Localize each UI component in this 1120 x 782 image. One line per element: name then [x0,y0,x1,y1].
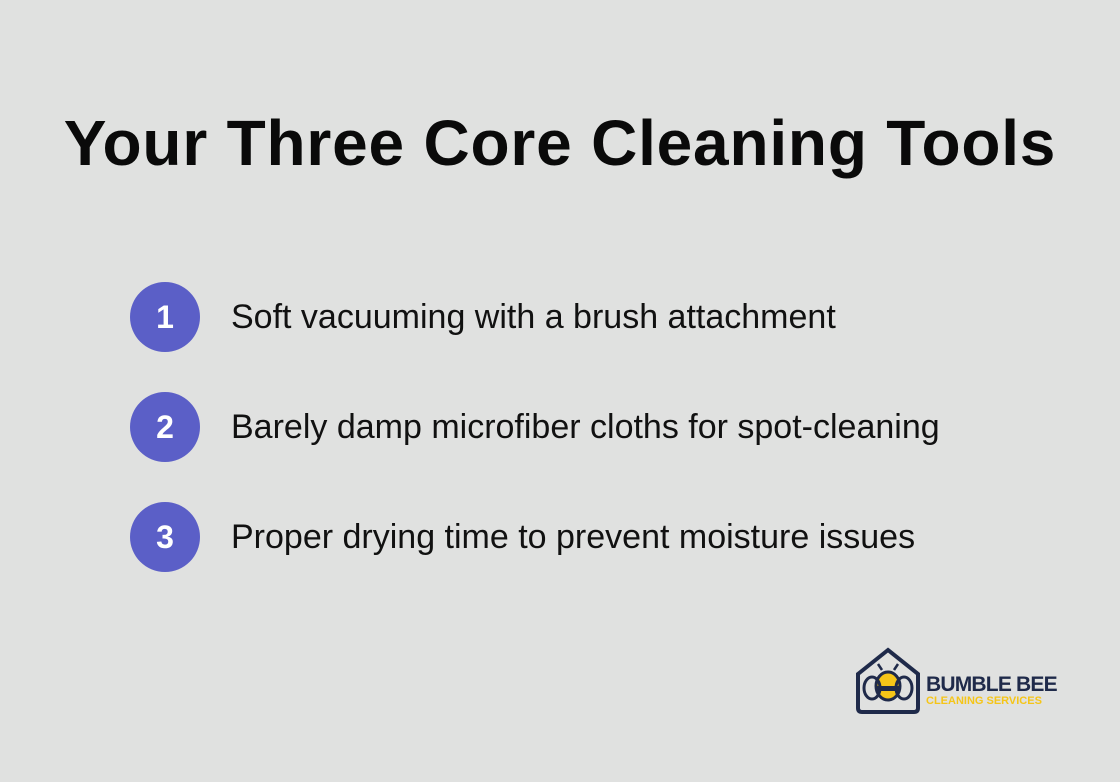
logo [856,648,1057,714]
item 2 [130,392,940,462]
logo text: BUMBLE BEE [926,673,1057,696]
icon: house bee [856,648,920,714]
item 2: Barely damp microfiber cloths for spot-cleaning [231,408,940,446]
item 2: 2 [156,409,174,445]
item 1 [130,282,836,352]
item 3: Proper drying time to prevent moisture issues [231,518,915,556]
item 3: 3 [156,519,174,555]
item 3 [130,502,915,572]
item 1: 1 [156,299,174,335]
item 1: Soft vacuuming with a brush attachment [231,298,836,336]
logo: CLEANING SERVICES [926,695,1042,707]
title: Your Three Core Cleaning Tools [64,107,1056,179]
